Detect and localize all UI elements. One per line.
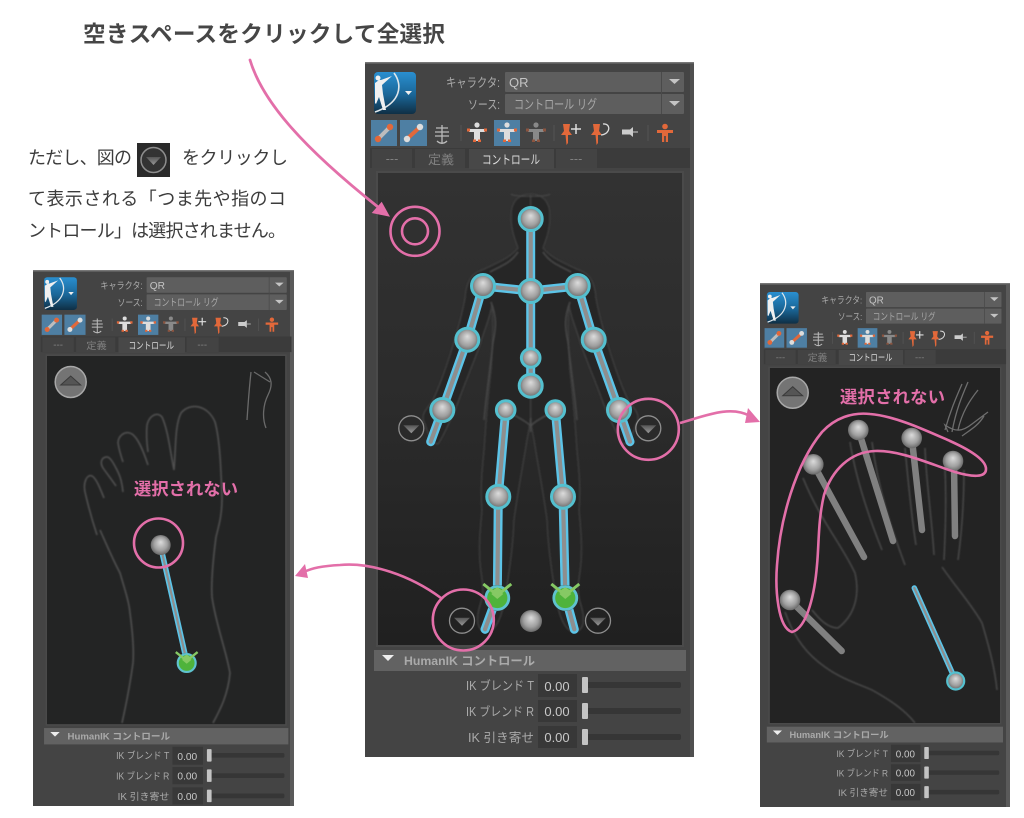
hand highlight circle <box>618 399 679 460</box>
panel labels: 0.00 <box>544 730 570 745</box>
panel: centre body controls <box>365 62 694 757</box>
panel labels: キャラクタ: <box>446 76 500 90</box>
mini foot thumbnail <box>247 372 271 428</box>
panel: hand controls: QR <box>869 295 884 306</box>
panel: foot controls: ソース: <box>118 298 143 309</box>
floor ball <box>520 610 542 632</box>
panel labels: コントロール <box>482 153 540 167</box>
panel labels: コントロール リグ <box>514 97 597 112</box>
panel labels: 定義 <box>428 152 455 167</box>
wrist bone <box>914 588 955 679</box>
panel labels: HumanIK コントロール <box>404 654 535 668</box>
panel: hand controls: コントロール <box>849 352 892 363</box>
callout: not selected: 選択されない <box>840 387 945 407</box>
panel labels: 0.00 <box>544 704 570 719</box>
callout: not selected: 選択されない <box>134 479 238 499</box>
toe joint <box>151 535 171 555</box>
text block: note: ただし、図の <box>28 148 132 168</box>
panel: hand controls: ソース: <box>838 311 862 322</box>
arrow: title to empty space <box>250 60 390 217</box>
collapse button <box>777 377 808 408</box>
panel: hand controls: HumanIK コントロール <box>790 730 889 740</box>
panel: hand controls: キャラクタ: <box>821 294 862 305</box>
ankle effectors <box>483 584 579 611</box>
title: 空きスペースをクリックして全選択 <box>83 22 445 47</box>
target marker <box>390 207 440 256</box>
panel: foot controls: QR <box>150 281 165 292</box>
finger joints <box>780 420 963 610</box>
highlight loop around fingers <box>776 414 986 632</box>
panel labels: 0.00 <box>544 679 570 694</box>
panel: hand controls: 0.00 <box>896 768 915 779</box>
panel: foot controls: IK 引き寄せ <box>118 791 169 803</box>
panel labels: --- <box>386 152 398 166</box>
skeleton joints <box>431 208 630 508</box>
panel: hand controls <box>760 283 1010 807</box>
toe bone <box>161 548 185 654</box>
expand buttons <box>399 416 661 633</box>
panel: hand controls: 0.00 <box>896 750 915 761</box>
panel: foot controls: キャラクタ: <box>100 280 143 292</box>
panel: hand controls: 0.00 <box>896 788 915 799</box>
panel: foot controls: コントロール <box>129 341 174 352</box>
panel: hand controls: --- <box>776 352 785 362</box>
hand illustration <box>785 442 997 723</box>
wrist joint <box>947 672 964 690</box>
panel: foot controls: IK ブレンド R <box>116 770 169 783</box>
panel labels <box>386 75 597 745</box>
icon: collapse button <box>137 143 170 177</box>
text block: note: て表示される「つま先や指のコ <box>28 189 286 209</box>
mini hand thumbnail <box>945 382 988 436</box>
foot illustration <box>84 407 230 723</box>
panel: foot controls: 0.00 <box>177 772 198 783</box>
text block: note: をクリックし <box>182 148 288 168</box>
panel: foot controls: HumanIK コントロール <box>68 732 171 742</box>
panel: hand controls: IK ブレンド R <box>836 767 888 778</box>
body silhouette <box>423 194 638 632</box>
arrow: to foot panel <box>295 564 441 598</box>
panel: hand controls: 定義 <box>808 352 828 363</box>
panel: hand controls: --- <box>915 352 924 362</box>
panel: foot controls: 定義 <box>86 339 107 352</box>
panel labels: IK 引き寄せ <box>468 731 534 745</box>
foot highlight circle <box>433 590 494 650</box>
panel labels: IK ブレンド T <box>466 678 534 693</box>
panel labels: --- <box>570 152 582 166</box>
ankle effector <box>176 652 198 673</box>
panel: hand controls: コントロール リグ <box>873 310 936 323</box>
skeleton bones <box>431 219 630 629</box>
panel labels: QR <box>509 75 528 90</box>
panel: foot controls: 0.00 <box>177 792 198 803</box>
panel labels: ソース: <box>468 98 500 112</box>
text block: note: ントロール」は選択されません。 <box>28 221 286 241</box>
panel: foot controls: --- <box>53 340 63 351</box>
panel: hand controls: IK 引き寄せ <box>838 787 888 798</box>
text block: note <box>28 143 288 241</box>
panel labels: IK ブレンド R <box>466 704 534 719</box>
panel: foot controls: --- <box>197 340 207 351</box>
panel: hand controls: IK ブレンド T <box>836 748 888 759</box>
panel: foot controls: コントロール リグ <box>154 296 219 309</box>
highlight circle <box>134 518 183 568</box>
panel: foot controls <box>33 270 294 806</box>
panel: foot controls: IK ブレンド T <box>116 749 169 762</box>
collapse button <box>55 366 86 398</box>
arrow: to hand panel <box>680 408 760 423</box>
finger bones <box>792 432 955 651</box>
panel: foot controls: 0.00 <box>177 752 198 763</box>
